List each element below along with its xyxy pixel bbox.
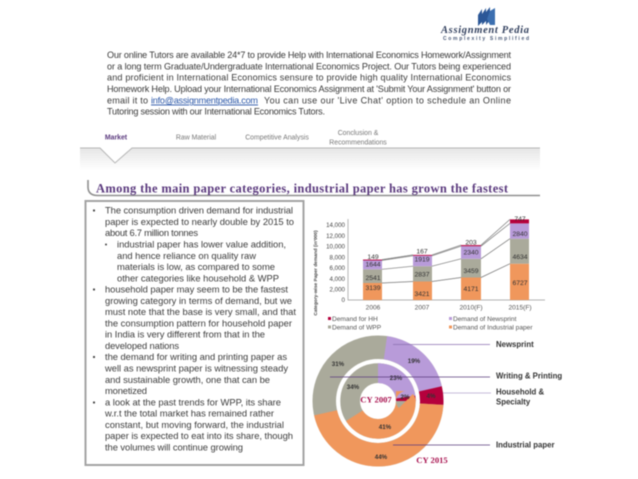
bar value labels: 167	[416, 248, 428, 256]
panel: key points text: w.r.t the total market has remained rather	[104, 408, 274, 418]
intro paragraph: info@assignmentpedia.com	[151, 96, 258, 106]
bar: 2006	[363, 260, 382, 300]
navigation tabs: Competitive Analysis	[245, 134, 309, 142]
title box curve	[88, 180, 540, 196]
donut callout lines and labels: Industrial paper	[496, 440, 554, 450]
panel: key points text: The consumption driven demand for industrial	[105, 204, 293, 216]
bar value labels: 2340	[463, 250, 479, 256]
bar value labels: 2541	[365, 275, 381, 282]
y axis labels: 14,000	[326, 222, 346, 229]
percentage labels: 34%	[347, 384, 360, 391]
legend: Demand for HH	[332, 316, 378, 323]
navigation tabs: Raw Material	[176, 134, 217, 142]
donut chart: CY 2007 inner and CY 2015 outer	[324, 347, 448, 465]
intro paragraph: and proficient in International Economics sensure to provide high quality International Economics	[107, 72, 511, 82]
percentage labels: 19%	[408, 358, 421, 365]
bar value labels: 3421	[414, 291, 430, 298]
intro paragraph: email it to	[107, 96, 148, 106]
y axis labels: 6,000	[330, 265, 346, 272]
navigation tabs	[105, 130, 387, 146]
y axis labels: 10,000	[326, 244, 346, 250]
donut callout lines and labels: Writing & Printing	[496, 372, 562, 380]
bar value labels: 1919	[414, 256, 430, 264]
bar value labels: 2840	[512, 231, 528, 238]
panel: key points text	[86, 201, 304, 465]
panel: key points text: the volumes will continue growing	[105, 442, 243, 452]
legend	[328, 316, 533, 332]
header band with chevron marker	[80, 148, 540, 170]
percentage labels: 23%	[390, 375, 403, 382]
panel: key points text: about 6.7 million tonnes	[105, 227, 198, 238]
percentage labels: 44%	[375, 454, 388, 461]
panel: key points text: the consumption pattern for household paper	[105, 318, 292, 328]
bar value labels: 3459	[463, 268, 479, 275]
donut callout lines and labels	[330, 340, 562, 450]
bar: 2015(F)	[510, 219, 529, 300]
intro paragraph	[107, 50, 511, 116]
panel: key points text: in India is very different from that in the	[105, 328, 265, 340]
x axis labels: 2007	[415, 304, 430, 312]
y axis labels: 0	[342, 297, 346, 304]
intro paragraph: Our online Tutors are available 24*7 to provide Help with International Economics Homework/Assignment	[107, 50, 511, 60]
panel: key points text: other categories like household & WPP	[117, 272, 279, 284]
y axis labels: 4,000	[330, 276, 346, 283]
panel: key points text: well as newsprint paper is witnessing steady	[104, 362, 288, 374]
legend: Demand of Newsprint	[453, 316, 517, 323]
panel: key points text: growing category in terms of demand, but we	[105, 295, 292, 306]
navigation tabs: Market	[105, 134, 128, 142]
panel: key points text: constant, but moving forward, the industrial	[105, 419, 284, 430]
navigation tabs: Conclusion &	[338, 130, 379, 137]
y axis labels: 8,000	[330, 254, 346, 262]
bar: 2010(F)	[461, 245, 481, 300]
x axis labels	[366, 304, 532, 312]
y axis labels: 12,000	[326, 233, 346, 240]
percentage labels: 4%	[427, 393, 436, 400]
bar value labels	[365, 216, 528, 298]
panel: key points text: and sustainable growth, one that can be	[105, 374, 270, 385]
percentage labels: 31%	[332, 361, 345, 368]
x axis labels: 2006	[366, 304, 381, 312]
year label: CY 2015: CY 2015	[416, 455, 448, 465]
bar value labels: 1644	[365, 262, 381, 268]
bar value labels: 2837	[414, 272, 430, 278]
panel: key points text: household paper may seem to be the fastest	[105, 284, 288, 294]
intro paragraph: Homework Help. Upload your International Economics Assignment at 'Submit Your Assignment' button or	[107, 84, 511, 94]
donut callout lines and labels: Specialty	[496, 398, 531, 406]
bar: 2007	[413, 255, 432, 300]
title: Among the main paper categories, industrial paper has grown the fastest	[96, 182, 509, 196]
panel: key points text: materials is low, as compared to some	[117, 261, 275, 272]
legend: Demand of Industrial paper	[453, 324, 533, 332]
legend: Demand of WPP	[332, 324, 382, 332]
intro paragraph: You can use our 'Live Chat' option to schedule an Online	[264, 96, 511, 106]
inner ring: CY 2007	[350, 373, 406, 429]
donut callout lines and labels: Household &	[496, 388, 544, 396]
y axis title: Category-wise Paper demand (in'000)	[313, 230, 319, 316]
y axis labels: 2,000	[330, 286, 346, 294]
panel: key points text: must note that the base is very small, and that	[105, 306, 296, 317]
bar value labels: 3139	[365, 285, 381, 292]
intro paragraph: Tutoring session with our International Economics Tutors.	[107, 106, 325, 116]
logo wordmark: Assignment Pedia	[440, 25, 529, 36]
panel: key points text: paper is expected to eat into its share, though	[105, 430, 293, 441]
bar value labels: 4634	[512, 254, 528, 261]
x axis labels: 2015(F)	[508, 304, 532, 312]
y axis labels	[326, 222, 346, 304]
navigation tabs: Recommendations	[329, 140, 387, 146]
outer ring: CY 2015	[324, 347, 432, 455]
icon: blue book stack	[478, 7, 495, 26]
panel: key points text: paper is expected to nearly double by 2015 to	[105, 216, 294, 227]
percentage labels: 41%	[379, 424, 392, 431]
logo tagline: Complexity Simplified	[443, 36, 529, 42]
percentage labels: 2%	[401, 394, 410, 401]
panel: key points text: monetized	[105, 385, 147, 396]
panel: key points text: a look at the past trends for WPP, its share	[105, 396, 281, 408]
percentage labels	[332, 358, 436, 461]
bar value labels: 4171	[463, 286, 479, 293]
panel: key points text: industrial paper has lower value addition,	[117, 238, 286, 250]
bar value labels: 6727	[512, 280, 528, 287]
logo: Assignment Pedia	[440, 7, 529, 42]
bar value labels: 203	[465, 240, 477, 246]
donut callout lines and labels: Newsprint	[496, 340, 534, 349]
x axis labels: 2010(F)	[459, 304, 483, 312]
panel: key points text: developed nations	[105, 340, 179, 351]
year label: CY 2007: CY 2007	[360, 394, 392, 404]
panel: key points text: the demand for writing and printing paper as	[105, 351, 287, 362]
panel: key points text: and hence reliance on quality raw	[117, 250, 256, 261]
intro paragraph: or a long term Graduate/Undergraduate International Economics Project. Our Tutors being experienced	[107, 62, 511, 72]
bar value labels: 149	[367, 254, 379, 261]
bar value labels: 747	[514, 216, 526, 223]
stacked bar chart: demand by category	[313, 216, 545, 332]
